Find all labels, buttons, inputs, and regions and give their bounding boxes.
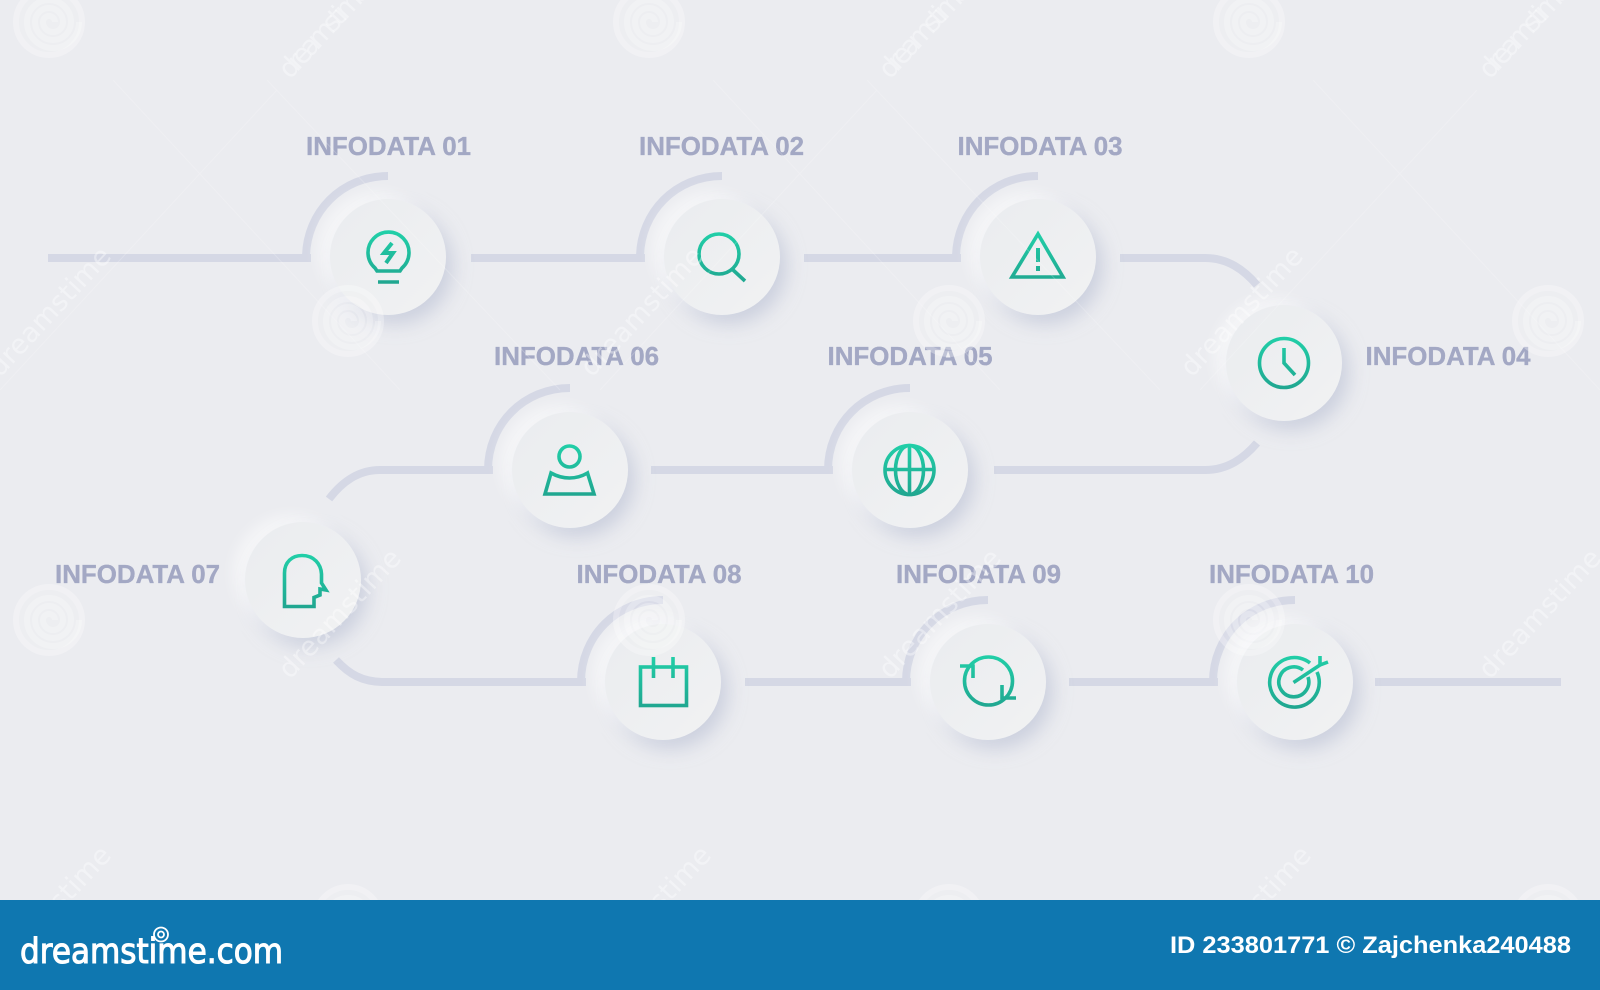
watermark overlay: dreamstime bbox=[272, 543, 408, 685]
node 10: target bbox=[1237, 624, 1353, 740]
watermark overlay: dreamstime bbox=[1174, 241, 1310, 383]
node 08: calendar bbox=[605, 624, 721, 740]
icon: person on map bbox=[545, 446, 594, 494]
label: INFODATA 01: INFODATA 01 bbox=[306, 133, 471, 161]
icon: head bbox=[284, 556, 326, 606]
node 03: warning bbox=[980, 199, 1096, 315]
connector line: 02 to 03 bbox=[804, 176, 1038, 258]
node 06: person with map bbox=[512, 412, 628, 528]
watermark overlay: dreamstime bbox=[1182, 840, 1318, 982]
icon: globe bbox=[885, 446, 934, 494]
icon: target with arrow bbox=[1270, 656, 1328, 707]
label: INFODATA 07: INFODATA 07 bbox=[55, 561, 220, 589]
icon: calendar bbox=[640, 657, 686, 706]
footer bar bbox=[0, 900, 1600, 990]
connector line: 06 to 07 bbox=[329, 388, 570, 499]
label: INFODATA 08: INFODATA 08 bbox=[576, 561, 742, 589]
logo spiral icon bbox=[154, 928, 168, 942]
connector line: 08 to 09 bbox=[745, 600, 988, 682]
label: INFODATA 05: INFODATA 05 bbox=[828, 343, 992, 371]
connector line: 07 to 08 bbox=[336, 600, 663, 682]
node 02: search bbox=[664, 199, 780, 315]
connector line: 04 to 05 bbox=[994, 443, 1257, 470]
label: INFODATA 03: INFODATA 03 bbox=[958, 133, 1122, 161]
connector line: 05 to 06 bbox=[651, 388, 910, 470]
icon: warning triangle bbox=[1012, 234, 1063, 277]
node 09: cycle bbox=[930, 624, 1046, 740]
node 01: lightbulb bbox=[330, 199, 446, 315]
label: INFODATA 04: INFODATA 04 bbox=[1366, 343, 1531, 371]
label: INFODATA 02: INFODATA 02 bbox=[639, 133, 804, 161]
watermark overlay: dreamstime bbox=[582, 840, 718, 982]
connector line: 01 to 02 bbox=[471, 176, 722, 258]
label: INFODATA 09: INFODATA 09 bbox=[896, 561, 1061, 589]
footer logo text: dreamstime.com bbox=[20, 932, 283, 972]
footer credit text: ID 233801771 © Zajchenka240488 bbox=[1170, 932, 1571, 959]
connector line: 09 to 10 bbox=[1069, 600, 1295, 682]
node 04: clock bbox=[1226, 305, 1342, 421]
label: INFODATA 10: INFODATA 10 bbox=[1209, 561, 1374, 589]
node 07: head profile bbox=[245, 522, 361, 638]
connector line: 03 to 04 bbox=[1120, 258, 1257, 285]
connector line: start to 01 bbox=[48, 176, 388, 258]
connector line: 10 to end bbox=[1375, 678, 1561, 686]
icon: magnifier bbox=[699, 234, 745, 281]
watermark overlay: dreamstime bbox=[872, 543, 1008, 685]
node 05: globe bbox=[852, 412, 968, 528]
icon: cycle arrows bbox=[960, 657, 1016, 705]
icon: clock bbox=[1260, 338, 1308, 388]
watermark overlay: dreamstime bbox=[574, 241, 710, 383]
label: INFODATA 06: INFODATA 06 bbox=[494, 343, 659, 371]
icon: lightbulb bbox=[368, 232, 409, 282]
